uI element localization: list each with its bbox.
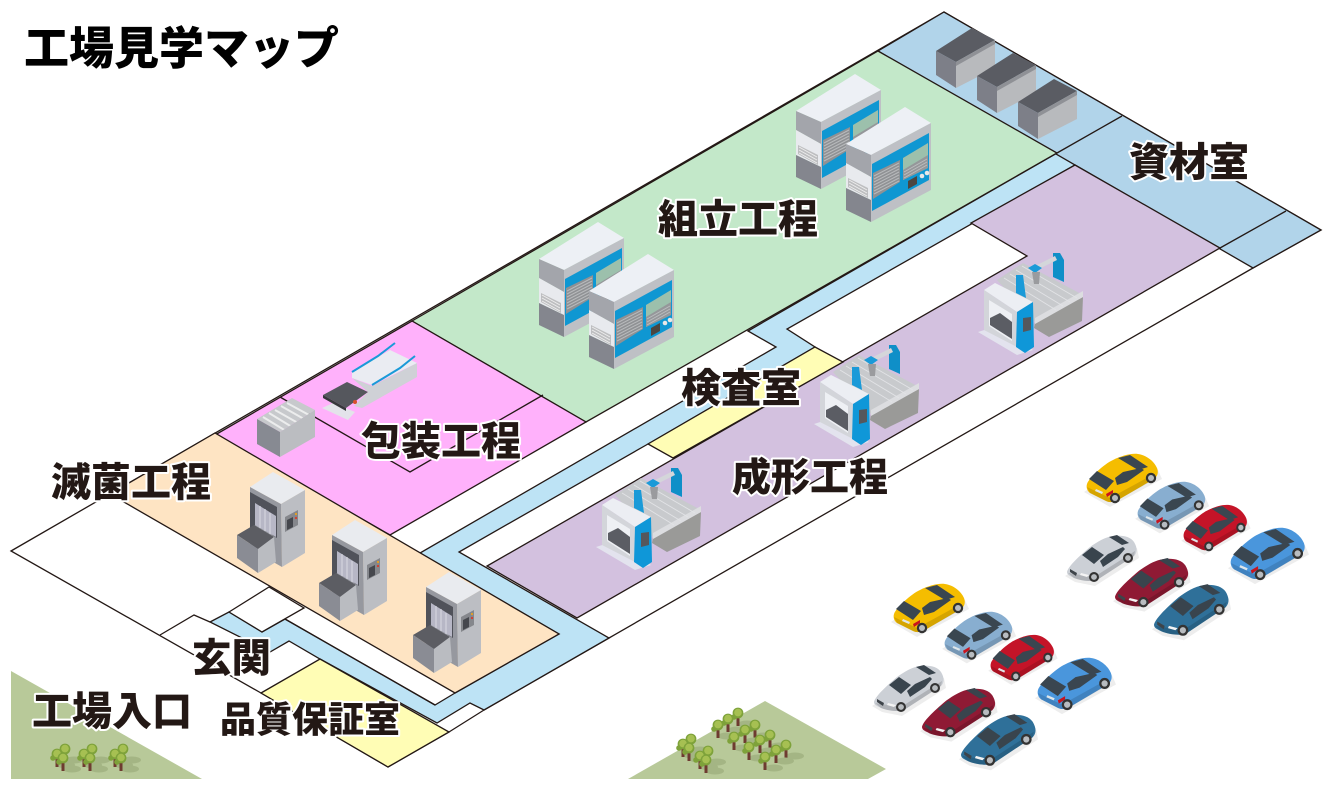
car: silver	[1065, 535, 1139, 586]
machine: packaging conveyor	[322, 343, 417, 420]
machines: storage bins	[936, 28, 1077, 139]
label: 包装工程: 包装工程	[361, 420, 521, 464]
car: blue	[1035, 658, 1116, 714]
label: 滅菌工程: 滅菌工程	[51, 461, 211, 505]
car: silver	[872, 665, 946, 716]
label: 玄関: 玄関	[192, 637, 271, 681]
label: 組立工程: 組立工程	[658, 198, 818, 242]
room: sterilization 滅菌工程	[110, 433, 559, 693]
car: red	[988, 635, 1058, 685]
label: 成形工程: 成形工程	[732, 456, 888, 500]
trees: central lawn	[676, 708, 804, 774]
machines: molding	[596, 253, 1083, 570]
room: quality assurance 品質保証室	[261, 659, 449, 767]
ground: central lawn	[628, 701, 886, 779]
room: assembly 組立工程	[412, 51, 1057, 422]
car: yellow	[891, 584, 969, 637]
car: yellow	[1084, 454, 1162, 507]
machines: assembly cabinets	[539, 74, 931, 369]
car: light blue	[942, 612, 1016, 663]
cars: upper parking row	[1065, 454, 1309, 640]
label: 資材室: 資材室	[1129, 141, 1249, 185]
corridor	[210, 153, 1075, 723]
label: 工場入口: 工場入口	[32, 690, 192, 734]
label: 品質保証室: 品質保証室	[220, 699, 400, 740]
car: light blue	[1135, 482, 1209, 533]
ground: entrance lawn	[11, 671, 202, 779]
car: red	[1181, 505, 1251, 555]
car: teal	[959, 714, 1038, 770]
room: packaging 包装工程	[215, 321, 586, 535]
room: material room 資材室	[878, 12, 1321, 268]
car: maroon	[1113, 558, 1191, 612]
room: inspection 検査室	[648, 347, 843, 458]
car: blue	[1228, 528, 1309, 584]
machines: sterilizers	[237, 472, 481, 673]
car: teal	[1152, 584, 1231, 640]
car: maroon	[920, 688, 998, 742]
machine: packaging tray box	[257, 398, 315, 457]
room: small entry room	[229, 587, 304, 632]
cars: lower parking row	[872, 584, 1116, 770]
trees: entrance lawn	[50, 744, 141, 772]
title: 工場見学マップ	[24, 23, 339, 74]
label: 検査室: 検査室	[681, 367, 801, 411]
room: molding 成形工程	[487, 165, 1220, 618]
wall lines	[160, 116, 1286, 705]
